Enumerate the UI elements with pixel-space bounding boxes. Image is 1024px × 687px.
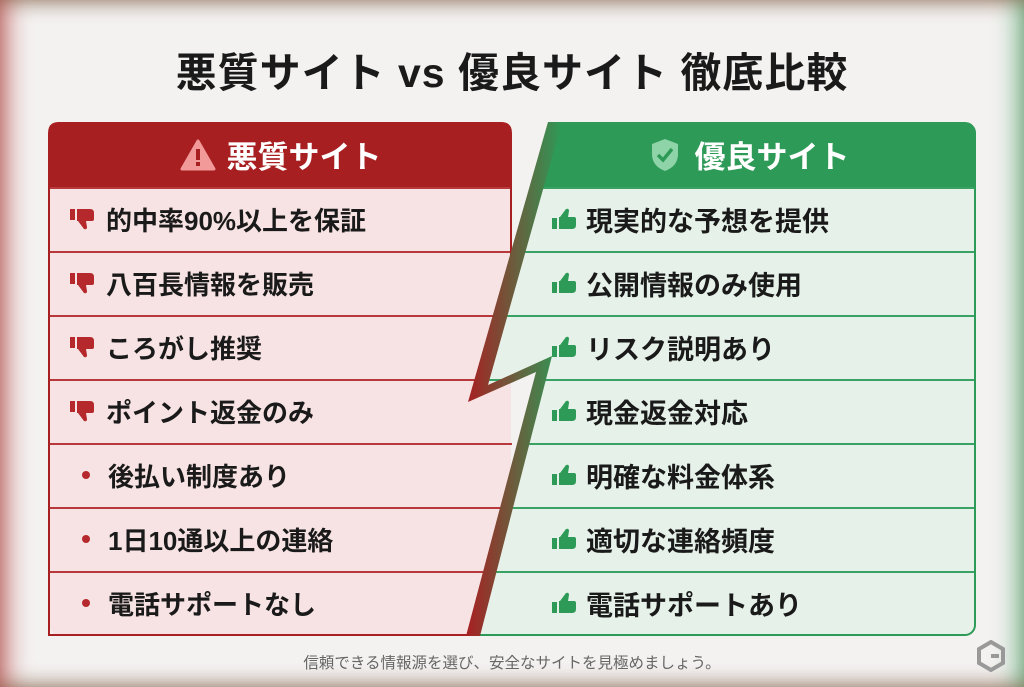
title: 悪質サイト vs 優良サイト 徹底比較 <box>176 50 848 96</box>
row 3: リスク説明あり <box>586 334 775 364</box>
row 7: 電話サポートあり <box>586 590 802 620</box>
row 6: 適切な連絡頻度 <box>586 526 775 556</box>
row 4: 現金返金対応 <box>586 398 748 428</box>
footer text: 信頼できる情報源を選び、安全なサイトを見極めましょう。 <box>303 655 721 672</box>
row 5: 後払い制度あり <box>108 462 290 492</box>
row 5: 明確な料金体系 <box>586 462 775 492</box>
icon: logo <box>977 640 1005 672</box>
row 1: 的中率90%以上を保証 <box>106 206 366 236</box>
row 3: ころがし推奨 <box>106 334 262 364</box>
row 7: 電話サポートなし <box>108 590 316 620</box>
row 4: ポイント返金のみ <box>106 398 314 428</box>
panel: bad sites <box>70 139 382 620</box>
header: bad: 悪質サイト <box>226 140 382 175</box>
header: good: 優良サイト <box>694 140 850 175</box>
row 6: 1日10通以上の連絡 <box>108 526 333 556</box>
panel backgrounds and lightning divider <box>48 122 976 636</box>
panel: good sites <box>552 139 850 620</box>
row 2: 八百長情報を販売 <box>106 270 314 300</box>
row 1: 現実的な予想を提供 <box>586 206 829 236</box>
row 2: 公開情報のみ使用 <box>586 270 802 300</box>
